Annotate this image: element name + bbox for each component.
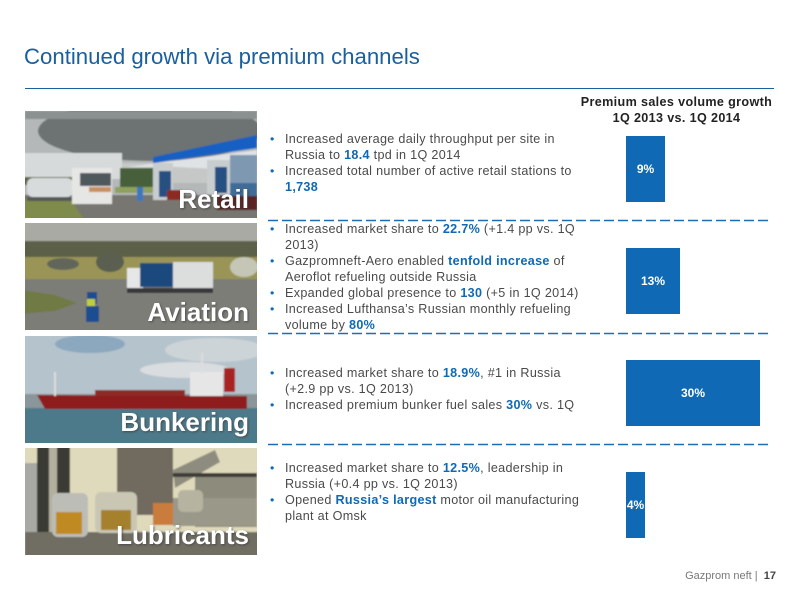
text block: lubricants: Increased market share to 12.5%, leadership in (285, 461, 563, 475)
text block: aviation: Aeroflot refueling outside Russia (285, 270, 477, 284)
chart heading (581, 95, 772, 125)
text block: lubricants (270, 461, 579, 523)
label: Aviation: Aviation (147, 297, 249, 327)
text block: aviation: • (270, 286, 274, 300)
bar: lubricants 4%: 4% (627, 498, 644, 512)
chart heading: Premium sales volume growth (581, 95, 772, 109)
title: Continued growth via premium channels (24, 44, 420, 69)
text block: retail: • (270, 164, 274, 178)
bar: retail 9% (626, 136, 665, 202)
text block: aviation: Increased market share to 22.7% (+1.4 pp vs. 1Q (285, 222, 575, 236)
label: Lubricants: Lubricants (116, 520, 249, 550)
text block: aviation: Expanded global presence to 130 (+5 in 1Q 2014) (285, 286, 579, 300)
bar: retail 9%: 9% (637, 162, 654, 176)
bar: aviation 13% (626, 248, 680, 314)
panel: aviation photo (25, 223, 257, 330)
footer: Gazprom neft | 17 (685, 570, 776, 582)
bar: bunkering 30%: 30% (681, 386, 705, 400)
bar: aviation 13%: 13% (641, 274, 665, 288)
text block: aviation: volume by 80% (285, 318, 375, 332)
text block: bunkering: Increased market share to 18.9%, #1 in Russia (285, 366, 561, 380)
text block: lubricants: plant at Omsk (285, 509, 367, 523)
panel: bunkering photo (25, 336, 257, 443)
text block: retail: • (270, 132, 274, 146)
text block: lubricants: Russia (+0.4 pp vs. 1Q 2013) (285, 477, 458, 491)
text block: retail: 1,738 (285, 180, 318, 194)
bar chart: premium sales volume growth (626, 136, 760, 538)
text block: bunkering: (+2.9 pp vs. 1Q 2013) (285, 382, 414, 396)
text block: retail: Russia to 18.4 tpd in 1Q 2014 (285, 148, 461, 162)
text block: aviation: 2013) (285, 238, 319, 252)
panel: lubricants photo (25, 448, 257, 555)
text block: aviation (270, 222, 579, 332)
bar: bunkering 30% (626, 360, 760, 426)
text block: aviation: Increased Lufthansa’s Russian monthly refueling (285, 302, 571, 316)
label: Bunkering: Bunkering (120, 407, 249, 437)
text block: retail: Increased total number of active retail stations to (285, 164, 572, 178)
text block: aviation: • (270, 254, 274, 268)
text block: bunkering: • (270, 366, 274, 380)
text block: bunkering (270, 366, 574, 412)
text block: aviation: • (270, 302, 274, 316)
text block: aviation: • (270, 222, 274, 236)
text block: lubricants: Opened Russia’s largest motor oil manufacturing (285, 493, 579, 507)
text block: bunkering: Increased premium bunker fuel sales 30% vs. 1Q (285, 398, 574, 412)
title rule (25, 88, 774, 89)
text block: lubricants: • (270, 493, 274, 507)
text block: bunkering: • (270, 398, 274, 412)
text block: retail (270, 132, 572, 194)
label: Retail: Retail (178, 184, 249, 214)
chart heading: 1Q 2013 vs. 1Q 2014 (613, 111, 740, 125)
text block: retail: Increased average daily throughput per site in (285, 132, 555, 146)
text block: aviation: Gazpromneft-Aero enabled tenfold increase of (285, 254, 565, 268)
panel: retail photo (25, 111, 257, 218)
text block: lubricants: • (270, 461, 274, 475)
bar: lubricants 4% (626, 472, 645, 538)
